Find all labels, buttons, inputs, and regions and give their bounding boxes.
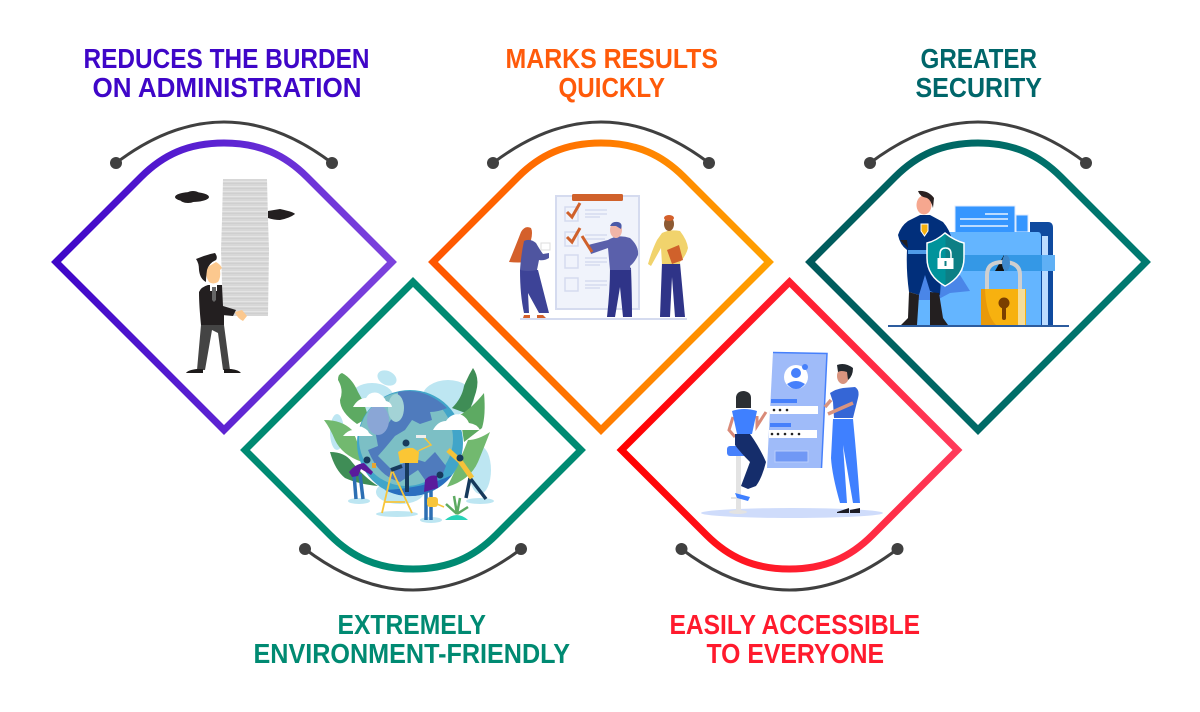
man with book [648,215,688,317]
diamond frame: green [245,282,581,590]
presenting man [582,222,638,317]
person pushing globe [448,450,486,499]
illustration: checklist with three people [509,194,688,320]
leaves [324,368,490,487]
heading: reduces the burden on administration: ON ADMINISTRATION [92,72,362,103]
login phone screen [767,352,827,468]
person watering plant [424,472,444,520]
heading: easily accessible to everyone: EASILY ACCESSIBLE [670,609,920,640]
heading: reduces the burden on administration: REDUCES THE BURDEN [84,43,370,74]
standing man [825,364,860,513]
diamond frame: orange [433,122,769,430]
heading: easily accessible to everyone: TO EVERYONE [706,638,884,669]
heading: easily accessible to everyone [670,609,920,669]
man figure [186,253,247,373]
seated woman on stool [727,391,766,514]
heading: greater security [916,43,1042,103]
heading: extremely environment-friendly: EXTREMELY [338,609,486,640]
folder and documents [917,206,1055,325]
woman [509,227,550,318]
heading: marks results quickly: MARKS RESULTS [506,43,718,74]
plant [445,496,468,520]
diamond frame: red [622,282,958,590]
hero figure [898,191,970,325]
floor line [888,325,1069,327]
icon: shield with lock [927,233,964,286]
heading: greater security: SECURITY [916,72,1042,103]
heading: marks results quickly: QUICKLY [558,72,665,103]
heading: marks results quickly [506,43,718,103]
ground shadows [348,498,494,523]
illustration: security hero with folder and padlock [888,191,1069,327]
icon: black clouds [175,191,295,220]
heading: extremely environment-friendly [254,609,570,669]
diamond frame: teal [810,122,1146,430]
illustration: man carrying paper stack [175,179,295,373]
diamond frame: purple [56,122,392,430]
padlock [981,255,1026,325]
illustration: earth with people and plants [324,367,494,523]
heading: greater security: GREATER [920,43,1037,74]
person with camera [349,456,376,499]
floor line [520,318,687,320]
background blobs [330,367,491,504]
icon: paper stack [221,179,269,316]
globe [357,390,463,496]
checklist board [556,194,639,309]
illustration: login screen with two people [701,352,883,518]
heading: reduces the burden on administration [84,43,370,103]
clouds [343,393,480,436]
heading: extremely environment-friendly: ENVIRONMENT-FRIENDLY [254,638,570,669]
floor shadow [701,508,883,518]
person on ladder [382,435,431,513]
